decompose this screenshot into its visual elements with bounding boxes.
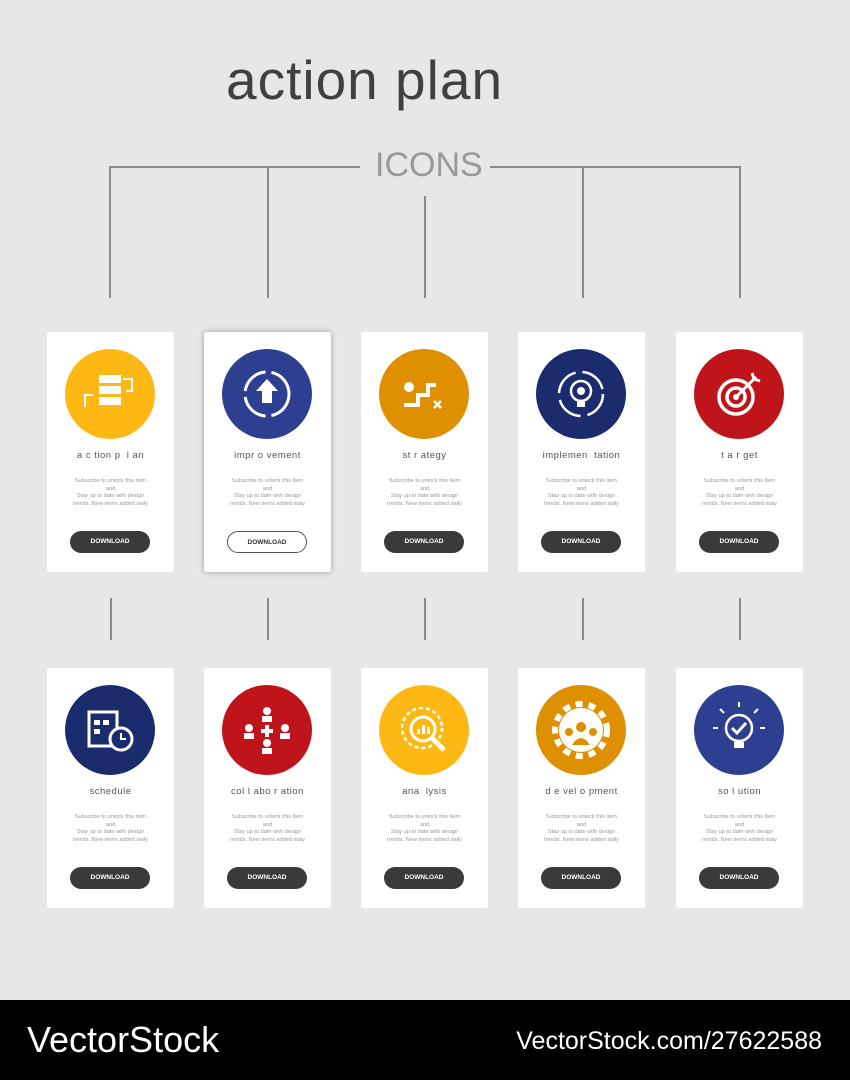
card: implementation: implemen tation: [543, 450, 620, 461]
title: action plan: [226, 49, 503, 111]
card: schedule: DOWNLOAD: [90, 874, 130, 881]
card: improvement: [204, 332, 331, 572]
subtitle: ICONS: ICONS: [375, 146, 483, 184]
icon: development: [536, 685, 626, 775]
card: development: [518, 668, 645, 908]
card: collaboration: Stay up to date with design trends. New items added daily: [230, 829, 305, 842]
card: implementation: DOWNLOAD: [562, 538, 600, 545]
card: development: Subscribe to unlock this item and: [546, 814, 617, 828]
card: target: Stay up to date with design trends. New items added daily: [702, 493, 777, 506]
card: collaboration: DOWNLOAD: [248, 874, 286, 881]
card: solution: DOWNLOAD: [720, 874, 758, 881]
card: analysis: [361, 668, 488, 908]
card: solution: Stay up to date with design trends. New items added daily: [702, 829, 777, 842]
connector tree: [109, 166, 741, 640]
icon: action plan: [65, 349, 155, 439]
card: schedule: schedule: [89, 786, 132, 797]
card: target: DOWNLOAD: [720, 538, 758, 545]
card: action plan: DOWNLOAD: [90, 538, 130, 545]
footer: VectorStock: [27, 1019, 219, 1060]
footer: VectorStock.com/27622588: [516, 1027, 822, 1055]
card: implementation: Subscribe to unlock this item and: [546, 478, 617, 492]
card: improvement: Subscribe to unlock this item and: [232, 478, 303, 492]
card: implementation: [518, 332, 645, 572]
icon: schedule: [65, 685, 155, 775]
card: analysis: ana lysis: [402, 786, 447, 797]
icon: collaboration: [222, 685, 312, 775]
card: solution: so l ution: [718, 786, 761, 797]
card: collaboration: [204, 668, 331, 908]
icon: implementation: [536, 349, 626, 439]
card: improvement: impr o vement: [234, 450, 301, 461]
footer: [0, 1000, 850, 1080]
icon: target: [694, 349, 784, 439]
card: target: Subscribe to unlock this item and: [704, 478, 775, 492]
card: schedule: [47, 668, 174, 908]
icon: solution: [694, 685, 784, 775]
card: strategy: Stay up to date with design trends. New items added daily: [387, 493, 462, 506]
card: implementation: Stay up to date with design trends. New items added daily: [544, 493, 619, 506]
card: collaboration: col l abo r ation: [231, 786, 304, 797]
card: target: t a r get: [721, 450, 758, 461]
card: action plan: [47, 332, 174, 572]
icon: analysis: [379, 685, 469, 775]
card: development: d e vel o pment: [545, 786, 618, 797]
card: collaboration: Subscribe to unlock this item and: [232, 814, 303, 828]
card: action plan: Subscribe to unlock this item and: [75, 478, 146, 492]
card: strategy: [361, 332, 488, 572]
card: analysis: Stay up to date with design trends. New items added daily: [387, 829, 462, 842]
card: target: [676, 332, 803, 572]
card: analysis: Subscribe to unlock this item and: [389, 814, 460, 828]
card: strategy: DOWNLOAD: [404, 538, 444, 545]
card: strategy: Subscribe to unlock this item and: [389, 478, 460, 492]
card: action plan: a c tion p l an: [77, 450, 144, 461]
card: solution: [676, 668, 803, 908]
icon: improvement: [222, 349, 312, 439]
card: action plan: Stay up to date with design trends. New items added daily: [73, 493, 148, 506]
card: schedule: Stay up to date with design trends. New items added daily: [73, 829, 148, 842]
card: development: Stay up to date with design trends. New items added daily: [544, 829, 619, 842]
card: strategy: st r ategy: [402, 450, 447, 461]
card: development: DOWNLOAD: [562, 874, 600, 881]
card: improvement: Stay up to date with design trends. New items added daily: [230, 493, 305, 506]
card: schedule: Subscribe to unlock this item and: [75, 814, 146, 828]
card: improvement: DOWNLOAD: [248, 539, 286, 546]
icon: strategy: [379, 349, 469, 439]
card: analysis: DOWNLOAD: [404, 874, 444, 881]
card: solution: Subscribe to unlock this item and: [704, 814, 775, 828]
